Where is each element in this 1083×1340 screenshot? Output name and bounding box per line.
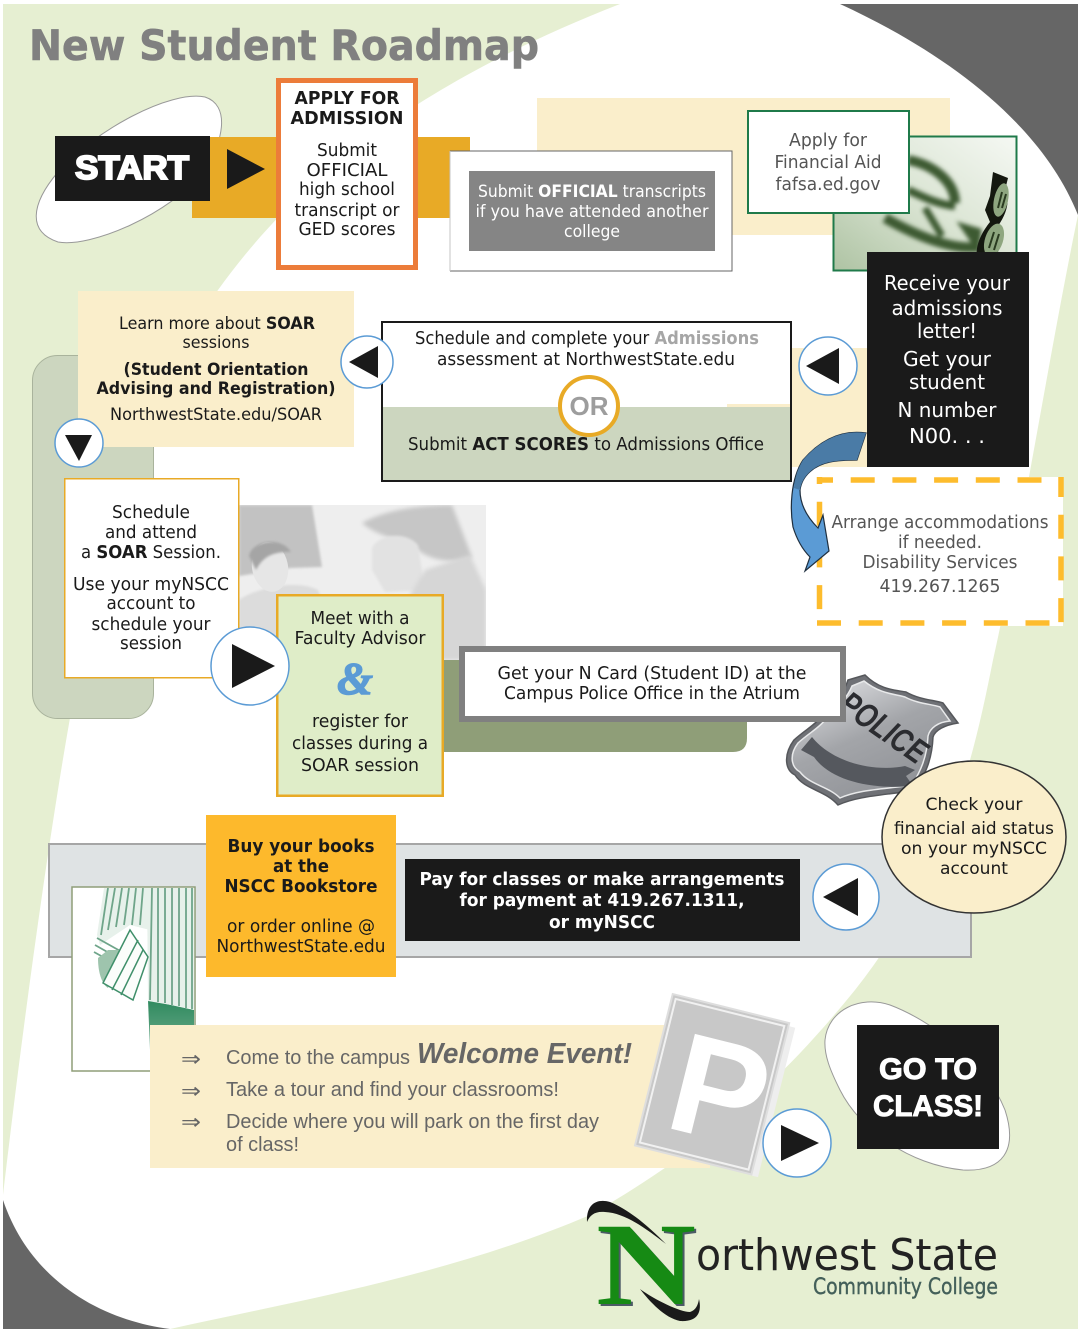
panel: sage column [32,356,154,718]
panel: schedule SOAR session: schedule your [92,614,211,635]
start shape [36,96,470,243]
panel: arrange accommodations: 419.267.1265 [880,577,1000,597]
panel: apply for admission: Submit [317,140,377,161]
panel: apply for financial aid: Financial Aid [774,153,882,173]
arrow: left to pay [813,864,879,930]
icon: police badge: POLICE [832,684,935,772]
panel: apply for admission: GED scores [298,219,396,240]
panel: schedule SOAR session: account to [106,593,196,614]
panel: assessment or ACT scores: Schedule and complete your Admissions [415,329,759,349]
panel: arrange accommodations [817,477,1063,626]
panel: N card: Get your N Card (Student ID) at the [498,663,806,684]
panel: official transcripts: Submit OFFICIAL transcripts [478,182,706,201]
panel: assessment or ACT scores: Submit ACT SCORES to Admissions Office [408,435,764,455]
panel: buy books: at the [273,856,329,877]
logo: Northwest State Community College: orthwest State [696,1230,998,1281]
panel: apply for financial aid: Apply for [789,131,868,151]
image: dollar sign [834,136,1016,270]
callout: financial aid status [882,761,1066,913]
panel: faculty advisor: SOAR session [301,755,419,776]
panel: apply for admission: ADMISSION [290,108,404,129]
go to class shape: GO TO [879,1053,977,1086]
panel: receive admissions letter: N00. . . [909,424,985,448]
panel: schedule SOAR session: session [120,633,182,654]
panel: pay for classes: or myNSCC [549,913,655,933]
panel: welcome event: ⇒ [181,1079,201,1103]
panel: schedule SOAR session: and attend [105,522,197,543]
panel: apply for admission [278,80,416,268]
cream backdrop [790,348,870,467]
logo: Northwest State Community College: N [598,1201,698,1332]
callout: financial aid status: Check your [926,795,1022,815]
panel: schedule SOAR session: Use your myNSCC [73,574,229,595]
panel: receive admissions letter: student [909,370,985,394]
panel: receive admissions letter: admissions [892,296,1002,320]
panel: apply for financial aid: fafsa.ed.gov [776,175,880,195]
panel: receive admissions letter: N number [898,398,997,422]
panel: learn about SOAR: NorthwestState.edu/SOAR [110,405,322,424]
dark green band [443,660,747,752]
panel: N card: Campus Police Office in the Atrium [504,683,800,704]
panel: welcome event: ⇒ [181,1047,201,1071]
panel: faculty advisor: classes during a [292,733,428,754]
panel: assessment or ACT scores [382,322,791,481]
go to class shape [825,1002,1010,1170]
image: student holding books [72,887,195,1071]
panel: pay for classes [405,859,800,941]
panel: assessment or ACT scores: assessment at NorthwestState.edu [437,350,735,370]
icon: parking sign: P [655,1002,785,1179]
panel: schedule SOAR session [65,479,239,678]
panel: apply for financial aid [748,111,909,213]
panel: learn about SOAR: Learn more about SOAR [119,314,315,333]
panel: receive admissions letter: Receive your [884,271,1011,295]
arrow: right to advisor [211,627,289,705]
panel: official transcripts: if you have attended another [476,202,709,221]
ampersand: & [337,653,373,704]
panel: welcome event: Take a tour and find your classrooms! [226,1079,559,1101]
panel: pay for classes: Pay for classes or make arrangements [420,870,784,890]
panel: arrange accommodations: Arrange accommodations [832,513,1048,533]
panel: apply for admission: APPLY FOR [294,88,400,109]
callout: financial aid status: on your myNSCC [901,839,1047,859]
panel: buy books [206,815,396,977]
panel: buy books: NorthwestState.edu [216,936,386,957]
panel: welcome event: Come to the campus [226,1047,410,1069]
panel: schedule SOAR session: a SOAR Session. [81,542,221,563]
panel: learn about SOAR: (Student Orientation [124,360,308,379]
panel: arrange accommodations: if needed. [898,533,982,553]
arrow: left to SOAR [341,336,393,388]
panel: learn about SOAR: Advising and Registration) [96,379,336,398]
arrow: down to schedule [55,419,103,467]
logo: Northwest State Community College: N [596,1199,696,1330]
panel: official transcripts [450,151,732,271]
panel: gray payment band [49,844,971,957]
panel: learn about SOAR [78,291,354,447]
panel: buy books: Buy your books [228,836,374,857]
arrow: start to apply [227,149,265,189]
start shape: START [75,149,189,186]
panel: apply for admission: transcript or [294,200,400,221]
arrow: left from letter [799,337,857,395]
image: faculty advisor photo [239,505,486,660]
panel: welcome event: ⇒ [181,1110,201,1134]
panel: buy books: NSCC Bookstore [224,876,378,897]
panel: welcome event: Welcome Event! [417,1038,632,1070]
panel: faculty advisor: register for [312,711,409,732]
callout: financial aid status: financial aid status [894,819,1054,839]
panel: buy books: or order online @ [227,916,375,937]
title: New Student Roadmap [29,21,539,70]
logo: Northwest State Community College [587,1199,998,1332]
callout: financial aid status: account [940,859,1008,879]
cream backdrop [537,98,950,235]
panel: welcome event [150,1025,710,1168]
panel: receive admissions letter [867,252,1029,467]
arrow: right to class [763,1109,831,1177]
icon: police badge [787,675,958,805]
panel: arrange accommodations: Disability Services [862,553,1018,573]
panel: apply for admission: OFFICIAL [306,160,388,181]
panel: welcome event: of class! [226,1134,299,1156]
panel: schedule SOAR session: Schedule [112,502,190,523]
panel: welcome event: Decide where you will park on the first day [226,1111,599,1133]
panel: receive admissions letter: letter! [917,319,977,343]
panel: faculty advisor [277,595,443,796]
logo: Northwest State Community College: Community College [813,1275,998,1300]
panel: assessment or ACT scores: OR [570,391,609,421]
panel: faculty advisor: Meet with a [310,608,410,629]
panel: apply for admission: high school [299,179,395,200]
panel: N card [462,649,843,719]
panel: pay for classes: for payment at 419.267.1311, [460,891,744,911]
panel: learn about SOAR: sessions [182,333,250,352]
panel: receive admissions letter: Get your [903,347,992,371]
go to class shape: CLASS! [873,1090,983,1123]
panel: official transcripts: college [564,222,620,241]
arrow: curved blue [791,432,866,571]
panel: faculty advisor: Faculty Advisor [294,628,426,649]
